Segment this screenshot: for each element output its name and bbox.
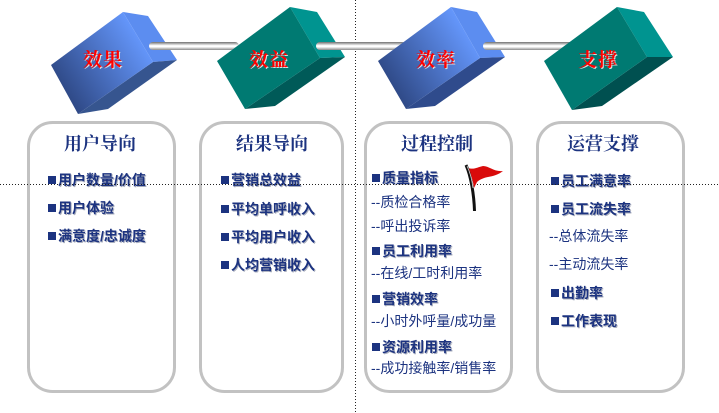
- cube: 支撑: 支撑: [579, 50, 619, 72]
- list item: 平均单呼收入: 平均单呼收入: [231, 201, 315, 217]
- cube: 支撑: 支撑: [578, 49, 618, 71]
- list item: 营销总效益: 营销总效益: [231, 172, 301, 188]
- cube: 效率: 效率: [417, 50, 457, 72]
- list item: 质量指标: 质量指标: [383, 171, 439, 187]
- list item: 出勤率: 出勤率: [561, 285, 603, 301]
- list item: 平均单呼收入: 平均单呼收入: [232, 202, 316, 218]
- cube: 效益: 效益: [250, 50, 290, 72]
- heading: 运营支撑: 运营支撑: [567, 134, 639, 154]
- cube: 效率: 效率: [416, 49, 456, 71]
- list item: 出勤率: 出勤率: [562, 286, 604, 302]
- sub item: 总体流失率: --总体流失率: [549, 228, 628, 244]
- sub item: 主动流失率: --主动流失率: [549, 256, 628, 272]
- list item: 平均用户收入: 平均用户收入: [232, 230, 316, 246]
- cube: 效率: [378, 7, 505, 109]
- list item: 满意度/忠诚度: 满意度/忠诚度: [59, 229, 147, 245]
- cube: 效果: 效果: [83, 49, 123, 71]
- connector rod: 效果 to 效益: [149, 42, 239, 50]
- list item: 用户体验: 用户体验: [58, 200, 114, 216]
- list item: 员工流失率: 员工流失率: [561, 201, 631, 217]
- sub item: 质检合格率: --质检合格率: [371, 194, 450, 210]
- sub item: 在线/工时利用率: --在线/工时利用率: [371, 265, 482, 281]
- list item: 营销效率: 营销效率: [383, 292, 439, 308]
- sub item: 小时外呼量/成功量: --小时外呼量/成功量: [371, 313, 496, 329]
- list item: 满意度/忠诚度: 满意度/忠诚度: [58, 228, 146, 244]
- cube: 效果: [51, 12, 177, 114]
- sub item: 呼出投诉率: --呼出投诉率: [371, 218, 450, 234]
- heading: 用户导向: 用户导向: [64, 134, 136, 154]
- list item: 平均用户收入: 平均用户收入: [231, 229, 315, 245]
- cube: 效果: 效果: [84, 50, 124, 72]
- list item: 资源利用率: 资源利用率: [382, 339, 452, 355]
- panel: 运营支撑: [538, 122, 684, 392]
- panel: 用户导向: [28, 122, 174, 392]
- panel: 过程控制: [366, 122, 512, 392]
- icon: red flag: [466, 165, 503, 211]
- list item: 用户数量/价值: 用户数量/价值: [58, 172, 146, 188]
- cube: 效益: [217, 7, 345, 109]
- cube: 支撑: [544, 7, 673, 110]
- cube: 效益: 效益: [249, 49, 289, 71]
- heading: 结果导向: 结果导向: [236, 134, 308, 154]
- list item: 员工流失率: 员工流失率: [562, 202, 632, 218]
- list item: 质量指标: 质量指标: [382, 170, 438, 186]
- list item: 营销总效益: 营销总效益: [232, 173, 302, 189]
- list item: 营销效率: 营销效率: [382, 291, 438, 307]
- list item: 员工利用率: 员工利用率: [383, 244, 453, 260]
- list item: 工作表现: 工作表现: [561, 313, 617, 329]
- list item: 用户数量/价值: 用户数量/价值: [59, 173, 147, 189]
- list item: 人均营销收入: 人均营销收入: [232, 258, 316, 274]
- sub item: 成功接触率/销售率: --成功接触率/销售率: [371, 360, 496, 376]
- list item: 工作表现: 工作表现: [562, 314, 618, 330]
- list item: 员工满意率: 员工满意率: [561, 173, 631, 189]
- panel: 结果导向: [200, 122, 342, 392]
- heading: 过程控制: 过程控制: [401, 134, 473, 154]
- list item: 资源利用率: 资源利用率: [383, 340, 453, 356]
- list item: 用户体验: 用户体验: [59, 201, 115, 217]
- connector rod: 效益 to 效率: [316, 42, 406, 50]
- list item: 人均营销收入: 人均营销收入: [231, 257, 315, 273]
- list item: 员工满意率: 员工满意率: [562, 174, 632, 190]
- connector rod: 效率 to 支撑: [483, 42, 573, 50]
- list item: 员工利用率: 员工利用率: [382, 243, 452, 259]
